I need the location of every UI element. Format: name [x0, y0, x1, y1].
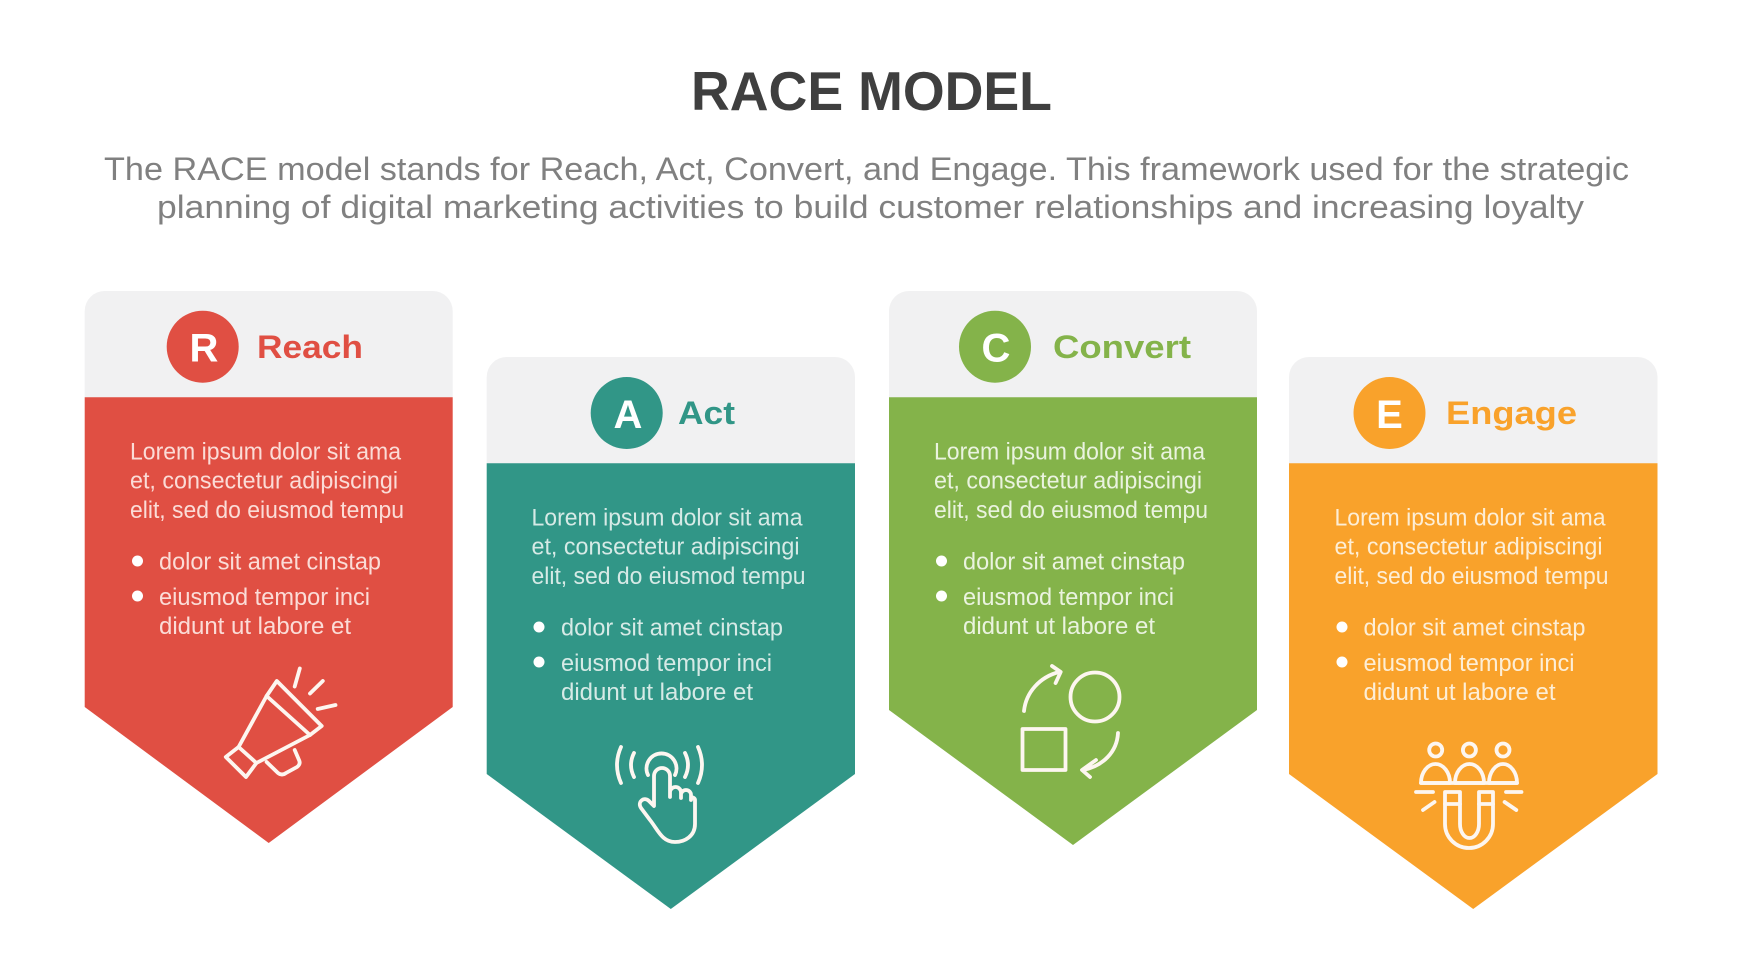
subtitle text: planning of digital marketing activities to build customer relationships and increasing loyalty	[157, 189, 1584, 225]
icon: people and magnet	[1416, 744, 1522, 848]
icon: conversion cycle	[1022, 666, 1120, 777]
text block: Act: elit, sed do eiusmod tempu	[532, 563, 806, 590]
text block: Convert: elit, sed do eiusmod tempu	[934, 497, 1208, 524]
subtitle text: The RACE model stands for Reach, Act, Convert, and Engage. This framework used for the strategic	[104, 151, 1629, 187]
arrow body: Engage	[1289, 463, 1658, 909]
header: Reach	[85, 291, 453, 398]
badge: E	[1354, 377, 1426, 449]
heading: Convert: Convert	[1053, 329, 1191, 365]
subtitle text	[104, 151, 1629, 225]
heading: Act: Act	[678, 395, 735, 431]
heading: Engage: Engage	[1446, 395, 1577, 431]
text block: Convert: Lorem ipsum dolor sit ama	[934, 438, 1206, 466]
title: RACE MODEL	[691, 60, 1052, 122]
header: Engage	[1289, 357, 1658, 464]
icon: megaphone	[226, 668, 336, 777]
badge: A: A	[614, 393, 642, 437]
badge: C: C	[982, 327, 1010, 371]
badge: C	[959, 311, 1031, 383]
badge: R: R	[190, 327, 219, 371]
text block: Engage: eiusmod tempor inci	[1364, 650, 1574, 677]
badge: A	[591, 377, 663, 449]
text block: Reach: eiusmod tempor inci	[159, 584, 370, 611]
heading: Reach: Reach	[257, 329, 363, 365]
text block: Reach	[130, 438, 404, 640]
text block: Act	[532, 504, 806, 706]
text block: Engage: dolor sit amet cinstap	[1364, 614, 1586, 642]
text block: Convert	[934, 438, 1208, 640]
text block: Convert: dolor sit amet cinstap	[963, 548, 1185, 576]
header: Convert	[889, 291, 1257, 398]
text block: Engage: Lorem ipsum dolor sit ama	[1334, 504, 1606, 532]
panel: Reach	[85, 291, 453, 843]
text block: Reach: Lorem ipsum dolor sit ama	[130, 438, 402, 466]
text block: Act: Lorem ipsum dolor sit ama	[532, 504, 803, 532]
text block: Reach: dolor sit amet cinstap	[159, 548, 381, 576]
text block: Act: dolor sit amet cinstap	[561, 614, 783, 642]
badge: R	[167, 311, 239, 383]
header: Act	[487, 357, 855, 464]
icon: tapping hand	[617, 747, 702, 842]
text block: Act: et, consectetur adipiscingi	[532, 534, 800, 560]
text block: Convert: didunt ut labore et	[963, 613, 1155, 640]
text block: Act: eiusmod tempor inci	[561, 650, 772, 677]
text block: Reach: didunt ut labore et	[159, 613, 351, 640]
text block: Engage	[1334, 504, 1608, 706]
arrow body: Reach	[85, 397, 453, 843]
arrow body: Convert	[889, 397, 1257, 845]
text block: Convert: eiusmod tempor inci	[963, 584, 1174, 611]
panel: Act	[487, 357, 855, 909]
text block: Engage: et, consectetur adipiscingi	[1334, 534, 1602, 560]
text block: Engage: elit, sed do eiusmod tempu	[1334, 563, 1608, 590]
badge: E: E	[1376, 393, 1403, 437]
panel: Convert	[889, 291, 1257, 845]
text block: Reach: et, consectetur adipiscingi	[130, 468, 398, 494]
text block: Reach: elit, sed do eiusmod tempu	[130, 497, 404, 524]
panel: Engage	[1289, 357, 1658, 909]
text block: Engage: didunt ut labore et	[1364, 679, 1556, 706]
arrow body: Act	[487, 463, 855, 909]
text block: Act: didunt ut labore et	[561, 679, 753, 706]
text block: Convert: et, consectetur adipiscingi	[934, 468, 1202, 494]
